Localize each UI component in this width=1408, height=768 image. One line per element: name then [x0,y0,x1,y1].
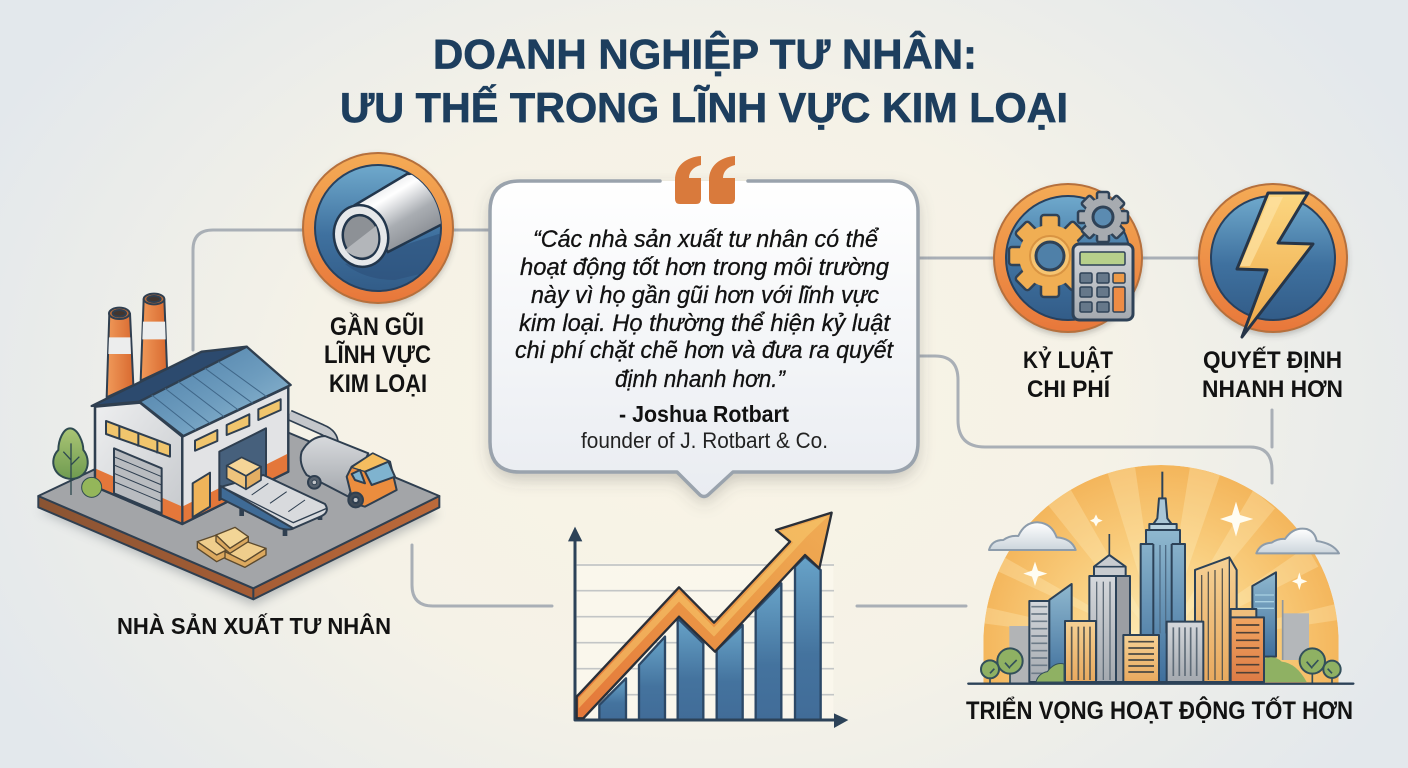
icon: lightning bolt [1199,184,1347,337]
label: gần gũi lĩnh vực kim loại: GẦN GŨI [330,311,424,341]
windows [106,399,281,457]
tree and bush [53,428,102,497]
label: kỷ luật chi phí [1023,345,1113,403]
quote text: định nhanh hơn.” [615,366,787,393]
pipe to tank [289,415,333,444]
quote attribution: - Joshua Rotbart [619,401,789,427]
sun [983,465,1339,683]
label: quyết định nhanh hơn: NHANH HƠN [1202,376,1343,403]
bars [599,557,821,720]
sparkles [1023,502,1307,590]
conveyor [221,475,327,536]
bushes and trees [981,648,1341,683]
chart: rising bars with arrow [568,513,848,728]
quote text: này vì họ gần gũi hơn với lĩnh vực [531,282,879,309]
label: quyết định nhanh hơn: QUYẾT ĐỊNH [1203,346,1342,374]
title: DOANH NGHIỆP TƯ NHÂN: [433,30,977,78]
icon: quotation mark [675,156,735,204]
quote text: kim loại. Họ thường thể hiện kỷ luật [519,310,891,337]
orange gear [1009,215,1091,297]
icon: metal pipe [303,153,460,303]
ground line [968,680,1353,687]
calculator [1073,244,1133,320]
quote attribution: founder of J. Rotbart & Co. [581,428,828,453]
quote attribution [581,401,828,453]
chimneys [107,294,167,397]
axes [568,527,848,728]
label: quyết định nhanh hơn [1202,346,1343,403]
connector lines [193,230,1272,606]
loading dock [219,428,266,500]
trend arrow [577,513,832,718]
title [340,30,1068,131]
label: gần gũi lĩnh vực kim loại [324,311,431,398]
icon: gears and calculator [994,184,1142,332]
quote text [515,226,894,393]
buildings [1009,472,1309,683]
gray gear [1078,192,1128,242]
label: kỷ luật chi phí: KỶ LUẬT [1023,345,1113,374]
gold bars [197,527,266,567]
label: gần gũi lĩnh vực kim loại: KIM LOẠI [329,370,427,398]
building [92,347,291,524]
box [227,457,261,489]
door [193,473,210,517]
label: gần gũi lĩnh vực kim loại: LĨNH VỰC [324,339,431,369]
quote text: hoạt động tốt hơn trong môi trường [520,254,889,281]
quote text: chi phí chặt chẽ hơn và đưa ra quyết [515,337,894,364]
platform [38,407,439,599]
label: triển vọng hoạt động tốt hơn: TRIỂN VỌNG HOẠT ĐỘNG TỐT HƠN [966,695,1353,725]
title: ƯU THẾ TRONG LĨNH VỰC KIM LOẠI [340,84,1068,131]
panel: quote bubble [490,156,918,497]
illustration: city skyline [968,465,1353,684]
garage door [114,448,162,513]
quote text: “Các nhà sản xuất tư nhân có thể [533,226,879,253]
clouds [989,522,1339,553]
label: nhà sản xuất tư nhân: NHÀ SẢN XUẤT TƯ NHÂN [117,611,391,639]
illustration: factory [38,294,439,605]
label: kỷ luật chi phí: CHI PHÍ [1027,375,1111,403]
tanker truck [301,436,397,507]
